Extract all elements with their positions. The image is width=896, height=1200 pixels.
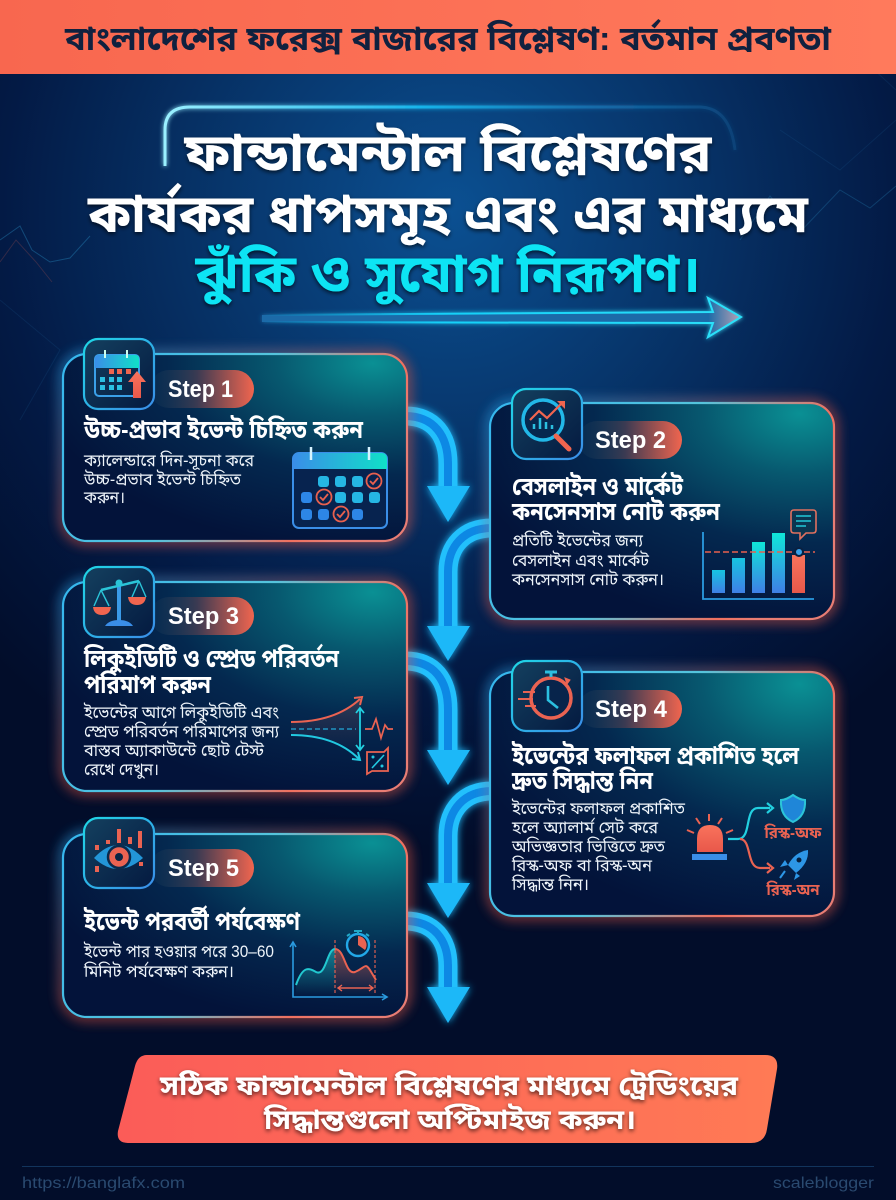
step 3 badge: [150, 597, 254, 635]
step 4 heading: [511, 741, 800, 795]
main title: [87, 122, 809, 306]
step 4 heading: ইভেন্টের ফলাফল প্রকাশিত হলে: [511, 741, 800, 770]
step 5 body: মিনিট পর্যবেক্ষণ করুন।: [83, 962, 234, 981]
illustration: calendar: [293, 447, 387, 528]
step 4 badge: [578, 690, 682, 728]
step 3 badge: Step 3: [168, 603, 239, 630]
icon: balance scale: [84, 567, 154, 637]
illustration: post-event chart: [290, 931, 387, 1000]
step 2 badge: Step 2: [595, 427, 666, 454]
title arrow: [262, 298, 741, 337]
illustration: bar chart: [703, 510, 816, 599]
banner text: [159, 1069, 739, 1135]
step 5 body: ইভেন্ট পার হওয়ার পরে 30–60: [83, 942, 274, 961]
icon: calendar with arrow: [84, 339, 154, 409]
main title: ফান্ডামেন্টাল বিশ্লেষণের: [183, 122, 713, 183]
step 4 badge: Step 4: [595, 696, 668, 723]
icon: eye with bars: [84, 818, 154, 888]
illustration: spread funnel: [291, 697, 393, 774]
arrow: step 4 to step 5: [427, 791, 492, 918]
arrow: step 1 to step 2: [405, 416, 470, 522]
step 3 body: রেখে দেখুন।: [84, 761, 159, 779]
title frame: [165, 107, 735, 166]
banner text: সিদ্ধান্তগুলো অপ্টিমাইজ করুন।: [263, 1103, 636, 1135]
banner text: সঠিক ফান্ডামেন্টাল বিশ্লেষণের মাধ্যমে ট্রেডিংয়ের: [159, 1069, 739, 1101]
step 4 body: ইভেন্টের ফলাফল প্রকাশিত: [511, 799, 685, 818]
step 2 heading: বেসলাইন ও মার্কেট: [512, 471, 684, 501]
call-to-action banner: [118, 1055, 777, 1143]
step 4 body: অভিজ্ঞতার ভিত্তিতে দ্রুত: [511, 837, 665, 856]
step 3 body: স্প্রেড পরিবর্তন পরিমাপের জন্য: [84, 722, 280, 741]
step 4 body: [511, 799, 685, 894]
panel: step 5: [63, 818, 407, 1017]
footer: scaleblogger: [773, 1175, 875, 1192]
icon: stopwatch: [512, 661, 582, 731]
step 4 body: রিস্ক-অফ বা রিস্ক-অন: [511, 856, 653, 875]
header band: [0, 0, 896, 74]
step 5 heading: ইভেন্ট পরবর্তী পর্যবেক্ষণ: [83, 905, 301, 936]
step 4 body: সিদ্ধান্ত নিন।: [511, 875, 589, 894]
step 2 badge: [578, 421, 682, 459]
step 1 heading: উচ্চ-প্রভাব ইভেন্ট চিহ্নিত করুন: [83, 415, 363, 444]
step 4 body: হলে অ্যালার্ম সেট করে: [511, 818, 658, 837]
step 2 body: [511, 531, 664, 589]
step 5 badge: Step 5: [168, 855, 239, 882]
decorative market lines: [0, 20, 896, 420]
footer: [22, 1166, 875, 1192]
step 1 body: উচ্চ-প্রভাব ইভেন্ট চিহ্নিত: [83, 470, 241, 489]
step 3 body: বাস্তব অ্যাকাউন্টে ছোট টেস্ট: [83, 741, 264, 760]
step 1 badge: [150, 370, 254, 408]
panel: step 4: [490, 661, 834, 916]
panel: step 1: [63, 339, 407, 541]
step 2 body: বেসলাইন এবং মার্কেট: [512, 551, 650, 570]
footer: https://banglafx.com: [22, 1175, 185, 1192]
flow arrows: [405, 416, 492, 1023]
header title: বাংলাদেশের ফরেক্স বাজারের বিশ্লেষণ: বর্তমান প্রবণতা: [64, 19, 832, 57]
step 2 heading: [511, 471, 720, 526]
arrow: step 2 to step 3: [427, 528, 492, 661]
step 5 body: [83, 942, 274, 981]
step 2 heading: কনসেনসাস নোট করুন: [511, 497, 720, 526]
step 1 body: করুন।: [83, 489, 125, 507]
step 1 body: [83, 451, 254, 507]
step 2 body: প্রতিটি ইভেন্টের জন্য: [512, 531, 644, 550]
illustration: alarm decision: রিস্ক-অফ: [764, 824, 822, 842]
illustration: alarm decision: [687, 795, 822, 899]
step 4 heading: দ্রুত সিদ্ধান্ত নিন: [511, 766, 653, 795]
step 3 body: [83, 703, 280, 779]
step 2 body: কনসেনসাস নোট করুন।: [511, 570, 664, 589]
step 5 badge: [150, 849, 254, 887]
illustration: alarm decision: রিস্ক-অন: [766, 881, 820, 899]
step 1 badge: Step 1: [168, 376, 233, 403]
step 3 body: ইভেন্টের আগে লিকুইডিটি এবং: [83, 703, 279, 722]
step 3 heading: লিকুইডিটি ও স্প্রেড পরিবর্তন: [83, 643, 339, 674]
main title: ঝুঁকি ও সুযোগ নিরূপণ।: [195, 243, 700, 306]
panel: step 3: [63, 567, 407, 791]
step 1 body: ক্যালেন্ডারে দিন-সূচনা করে: [83, 451, 254, 470]
step 3 heading: [83, 643, 339, 699]
icon: magnifier with chart: [512, 389, 582, 459]
main title: কার্যকর ধাপসমূহ এবং এর মাধ্যমে: [87, 182, 809, 247]
step 3 heading: পরিমাপ করুন: [84, 670, 211, 699]
arrow: step 3 to step 4: [405, 661, 470, 785]
panel: step 2: [490, 389, 834, 619]
arrow: step 5 to banner: [405, 921, 470, 1023]
